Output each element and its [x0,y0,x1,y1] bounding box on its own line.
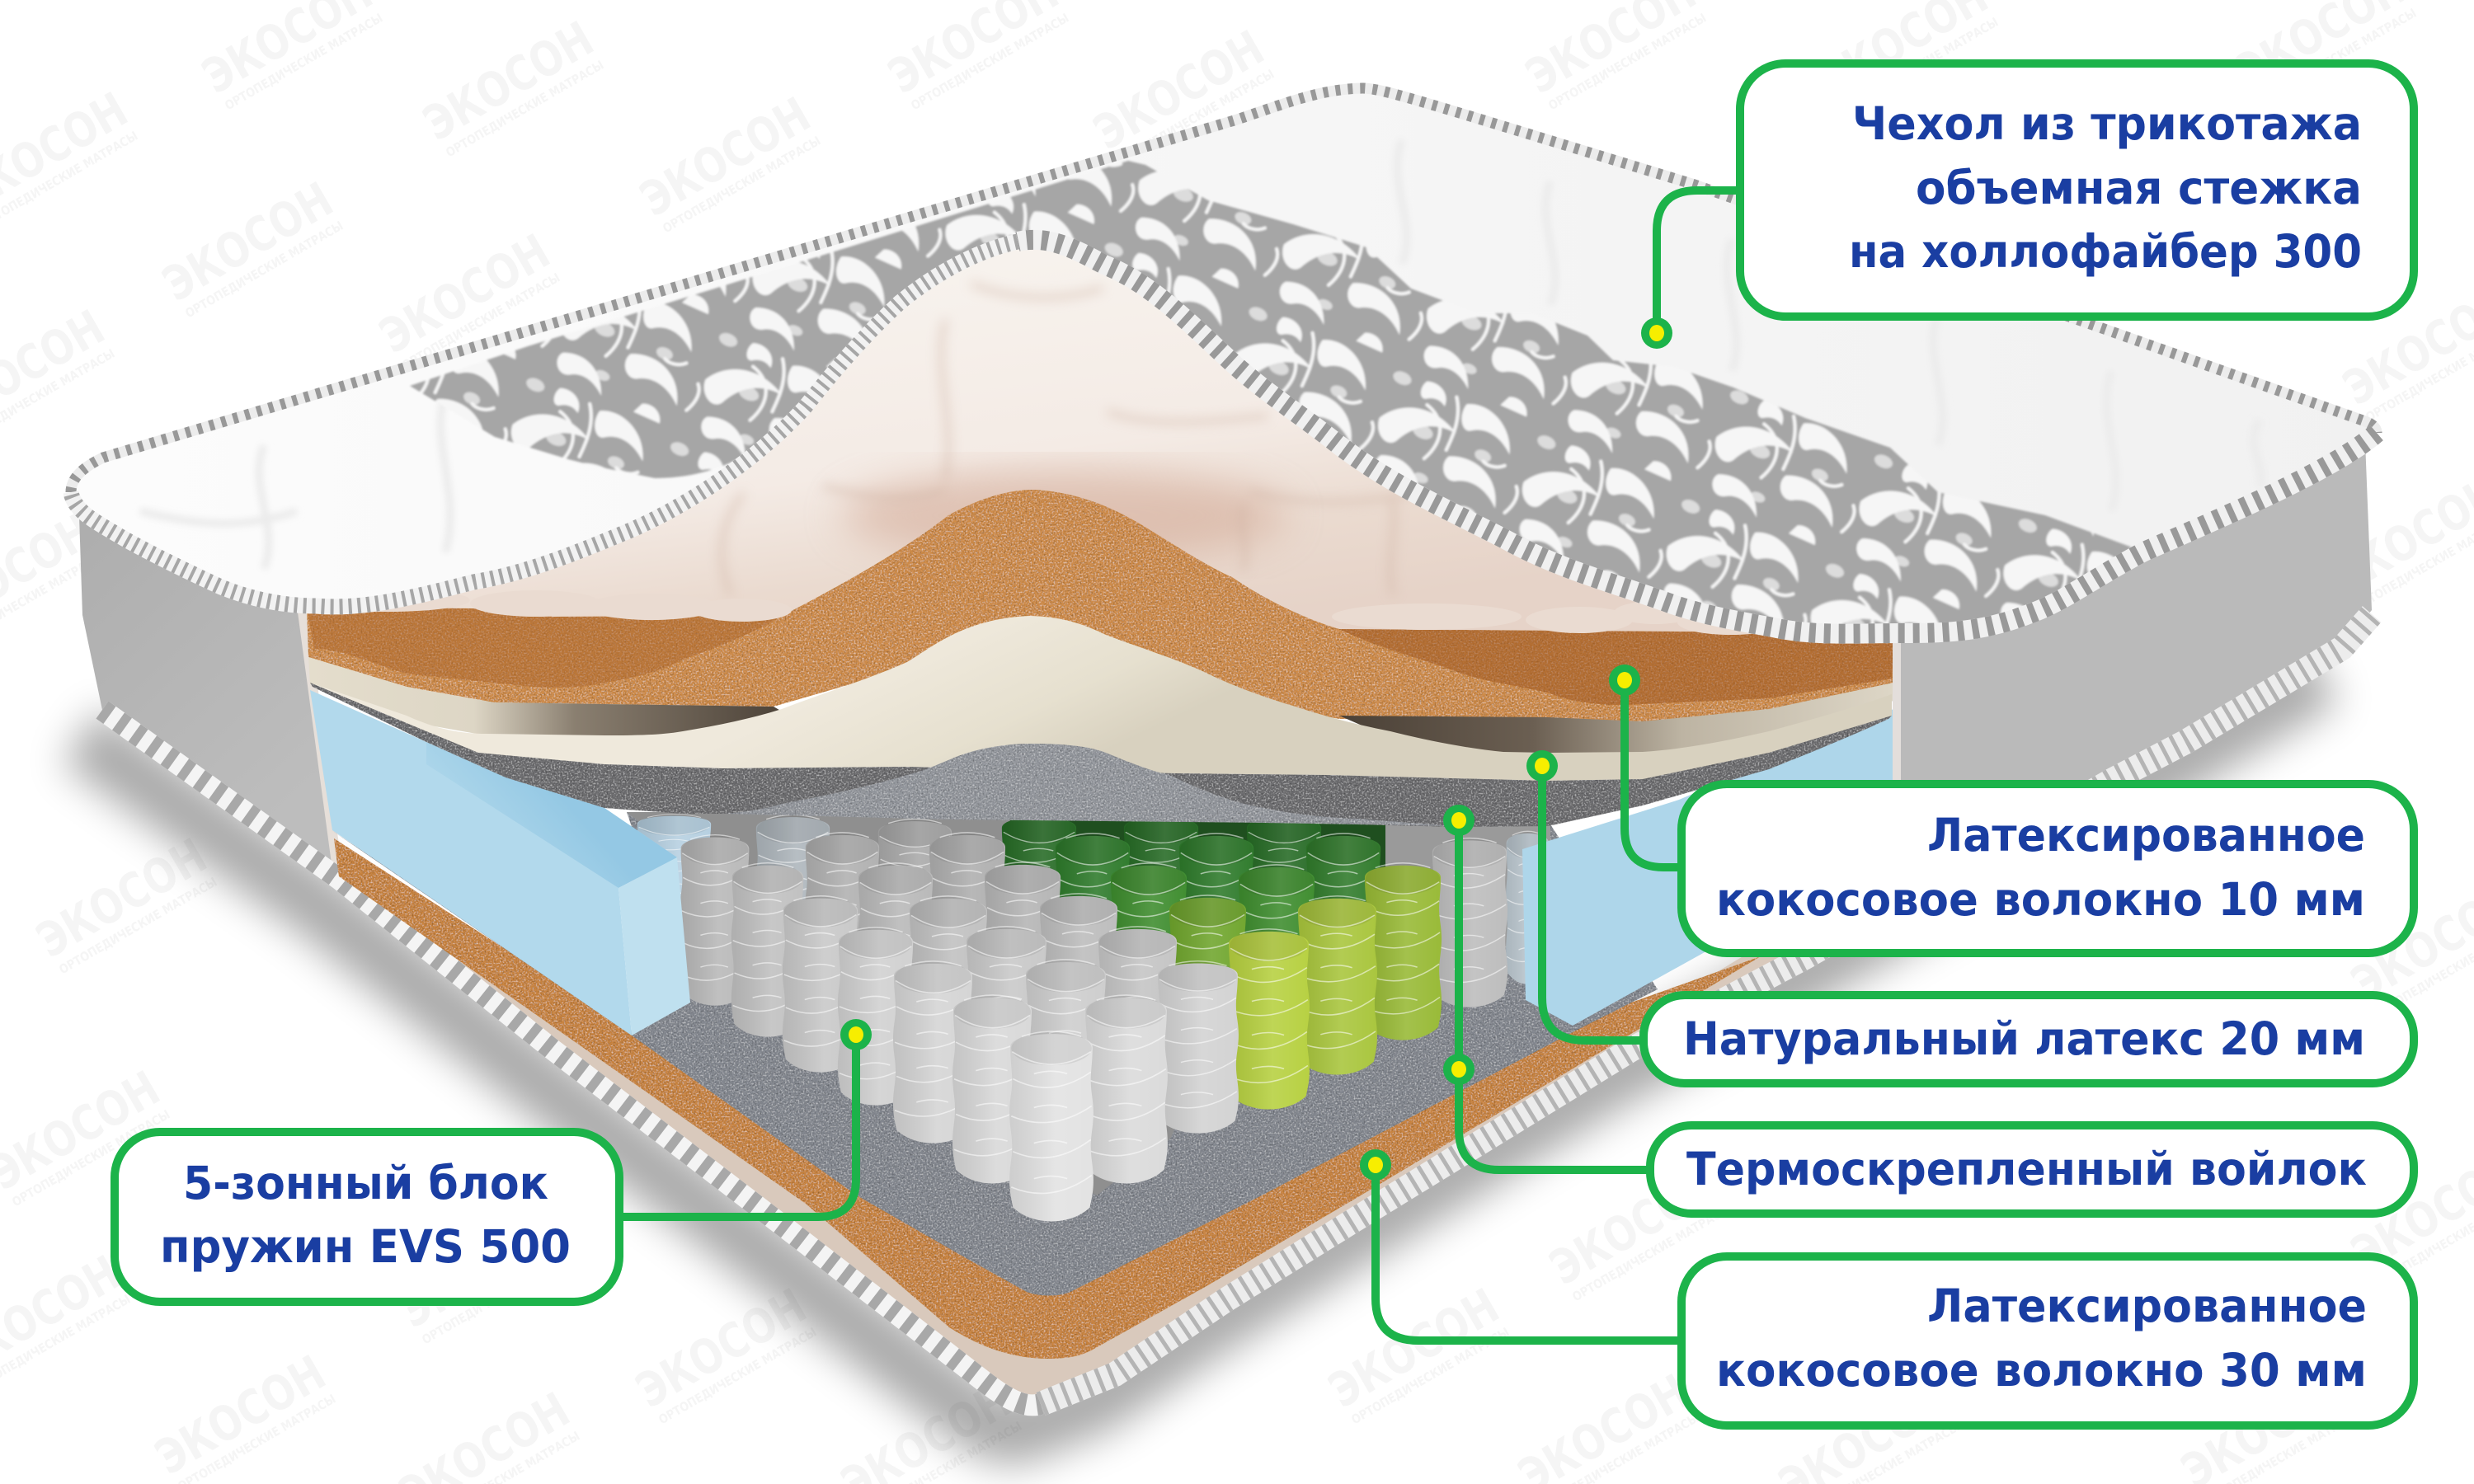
left side fabric [79,516,339,876]
callout: cover [1641,63,2414,349]
right foam block [1522,709,1893,1026]
marker dot: coconut 30 mm [1360,1149,1391,1181]
cover quilting [140,140,2261,569]
floor felt layer [332,812,1658,1296]
flat coconut right [1339,629,1895,705]
natural latex layer [310,616,1892,781]
label: coconut 30 mm [1716,1280,2367,1397]
callout box: spring block [115,1132,619,1302]
label: cover: Чехол из трикотажа [1852,97,2362,150]
marker dot: latex [1526,750,1558,782]
spring block [627,812,1550,1221]
callout box: coconut 10 mm [1681,784,2414,953]
label: coconut 10 mm: Латексированное [1927,809,2365,862]
watermark pattern: ОРТОПЕДИЧЕСКИЕ МАТРАСЫ [1837,15,2001,117]
left foam block [310,690,690,1036]
label: coconut 10 mm [1716,809,2365,926]
label: coconut 10 mm: кокосовое волокно 10 мм [1716,873,2365,926]
callout: latex [1526,750,2414,1083]
lower piping [102,614,2372,1405]
label: cover: объемная стежка [1916,162,2362,214]
shadow gap left [308,657,792,736]
callout box: latex [1644,995,2414,1083]
right side trim [1893,635,1901,783]
flat coconut left [307,608,782,688]
mattress top cover [71,88,2377,634]
callout box: coconut 30 mm [1681,1256,2414,1425]
callout: spring block [115,1019,872,1302]
watermark pattern: ОРТОПЕДИЧЕСКИЕ МАТРАСЫ [182,218,346,321]
shadow gap right [1339,683,1893,763]
callout box: felt [1650,1125,2414,1214]
watermark pattern: ЭКОСОН [1319,1278,1508,1419]
marker dot: felt lower [1443,1054,1475,1085]
watermark pattern: ЭКОСОН [627,1278,816,1419]
watermark pattern: ЭКОСОН [370,223,559,364]
top edge piping [71,88,2377,492]
watermark pattern: ОРТОПЕДИЧЕСКИЕ МАТРАСЫ [1113,67,1277,169]
label: cover: на холлофайбер 300 [1849,225,2362,278]
watermark pattern: ОРТОПЕДИЧЕСКИЕ МАТРАСЫ [1348,1325,1512,1427]
callout: coconut 10 mm [1609,665,2414,953]
watermark pattern: ЭКОСОН [27,828,216,969]
callout box: cover [1740,63,2414,317]
foam quilting [722,284,1407,594]
label: spring block: пружин EVS 500 [160,1220,571,1273]
side edge trim [302,606,338,876]
drop shadow [82,674,2321,1431]
lower beige cover [339,879,1805,1405]
watermark pattern: ОРТОПЕДИЧЕСКИЕ МАТРАСЫ [9,1107,172,1209]
watermark pattern: ЭКОСОН [390,1198,579,1339]
label: coconut 30 mm: кокосовое волокно 30 мм [1716,1344,2367,1397]
foam top face [426,742,677,888]
spring block backing [627,812,1245,1195]
watermark pattern: ЭКОСОН [153,171,342,312]
bottom coconut layer [334,838,1761,1359]
fold edge cord: right [1018,240,2377,634]
watermark pattern: ЭКОСОН [1540,1155,1729,1296]
marker dot: felt upper [1443,805,1475,836]
watermark pattern: ОРТОПЕДИЧЕСКИЕ МАТРАСЫ [56,875,219,977]
top coconut layer [307,490,1895,723]
marker dot: coconut 10 mm [1609,665,1640,696]
label: cover [1849,97,2362,278]
felt light fold [726,744,1453,826]
marker dot: cover [1641,317,1672,349]
callout: felt [1443,805,2414,1214]
watermark pattern: ОРТОПЕДИЧЕСКИЕ МАТРАСЫ [660,134,823,236]
watermark pattern: ЭКОСОН [631,87,820,228]
green zone backing [998,812,1385,956]
foam scallops over coconut [305,589,1905,635]
label: latex: Натуральный латекс 20 мм [1683,1012,2365,1065]
label: spring block: 5-зонный блок [183,1157,548,1209]
watermark pattern: ОРТОПЕДИЧЕСКИЕ МАТРАСЫ [656,1325,819,1427]
callout: coconut 30 mm [1360,1149,2414,1425]
watermark pattern: ОРТОПЕДИЧЕСКИЕ МАТРАСЫ [399,270,562,373]
label: spring block [160,1157,571,1273]
watermark pattern: ОРТОПЕДИЧЕСКИЕ МАТРАСЫ [419,1245,582,1347]
watermark pattern: ЭКОСОН [146,1345,335,1484]
foam side face [618,857,690,1036]
label: coconut 30 mm: Латексированное [1927,1280,2367,1332]
foam shading near coconut [841,470,1286,561]
right spring backing [1369,812,1550,965]
damask pattern band [410,161,2137,634]
right side fabric [1896,441,2372,783]
watermark pattern: ОРТОПЕДИЧЕСКИЕ МАТРАСЫ [443,58,606,160]
label: felt: Термоскрепленный войлок [1686,1143,2367,1195]
watermark pattern: ЭКОСОН [1084,20,1273,161]
thermo-bonded felt layer [310,683,1892,827]
under-cover hollofiber foam [316,240,1900,660]
fold edge cord: left [71,242,1018,607]
watermark pattern: ОРТОПЕДИЧЕСКИЕ МАТРАСЫ [1569,1202,1733,1304]
marker dot: spring block [840,1019,872,1050]
